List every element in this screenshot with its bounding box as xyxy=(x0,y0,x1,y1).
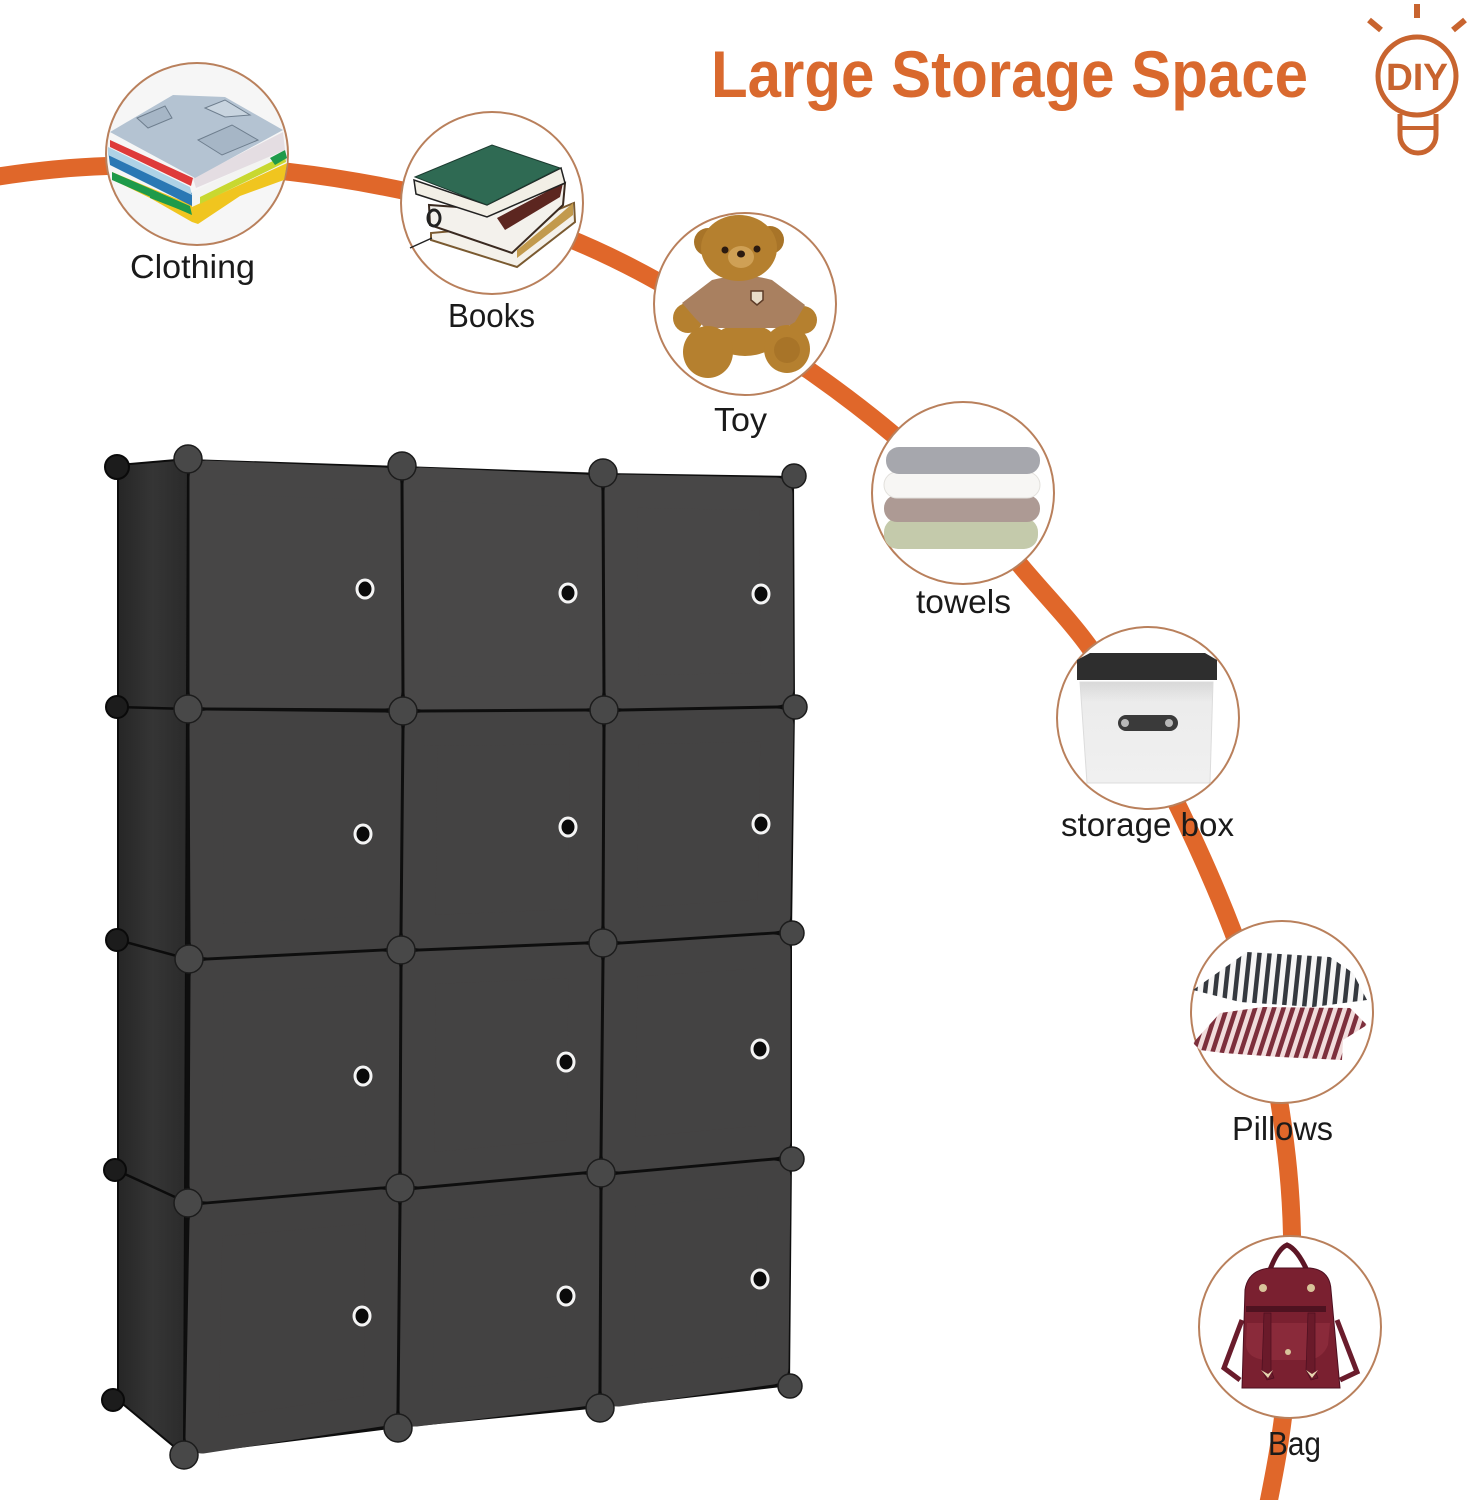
label: Books: Books xyxy=(448,297,535,334)
storage item: storage box xyxy=(1057,627,1239,809)
label: storage box: storage box xyxy=(1061,806,1234,843)
cabinet doors xyxy=(202,477,777,1437)
icon: two striped pillows xyxy=(1193,952,1367,1060)
clothing circle xyxy=(106,63,288,245)
storage item: toy xyxy=(654,213,836,395)
title: Large Storage Space xyxy=(711,37,1308,111)
label: Pillows: Pillows xyxy=(1232,1110,1333,1147)
cabinet side panel xyxy=(118,459,188,1455)
books circle xyxy=(401,112,583,294)
icon: teddy bear xyxy=(673,215,817,378)
storage item: clothing xyxy=(106,63,288,245)
label: Bag: Bag xyxy=(1268,1425,1321,1462)
icon: DIY light bulb xyxy=(1369,4,1465,153)
storage box circle xyxy=(1057,627,1239,809)
orange connecting curve xyxy=(0,165,1292,1500)
pillows circle xyxy=(1191,921,1373,1103)
label: towels: towels xyxy=(916,583,1011,620)
left side connectors xyxy=(102,455,129,1411)
icon: lidded storage box xyxy=(1077,653,1217,783)
storage item: towels xyxy=(872,402,1054,584)
front panel connectors xyxy=(170,445,807,1469)
storage item: books xyxy=(401,112,583,294)
door finger holes xyxy=(354,580,769,1325)
bag circle xyxy=(1199,1236,1381,1418)
toy circle xyxy=(654,213,836,395)
towels circle xyxy=(872,402,1054,584)
cabinet body frame xyxy=(184,459,795,1455)
cabinet side shelf edges xyxy=(116,707,188,1203)
label: Toy: Toy xyxy=(714,401,768,438)
storage item: bag xyxy=(1199,1236,1381,1418)
icon: stacked towels xyxy=(884,447,1040,549)
icon: folded clothes stack xyxy=(108,95,287,224)
storage cabinet xyxy=(102,445,807,1469)
storage item: pillows xyxy=(1191,921,1373,1103)
icon: stack of books xyxy=(410,145,575,267)
label: Clothing: Clothing xyxy=(130,248,255,285)
icon: burgundy backpack xyxy=(1224,1245,1357,1388)
icon: DIY light bulb: DIY xyxy=(1386,57,1448,99)
